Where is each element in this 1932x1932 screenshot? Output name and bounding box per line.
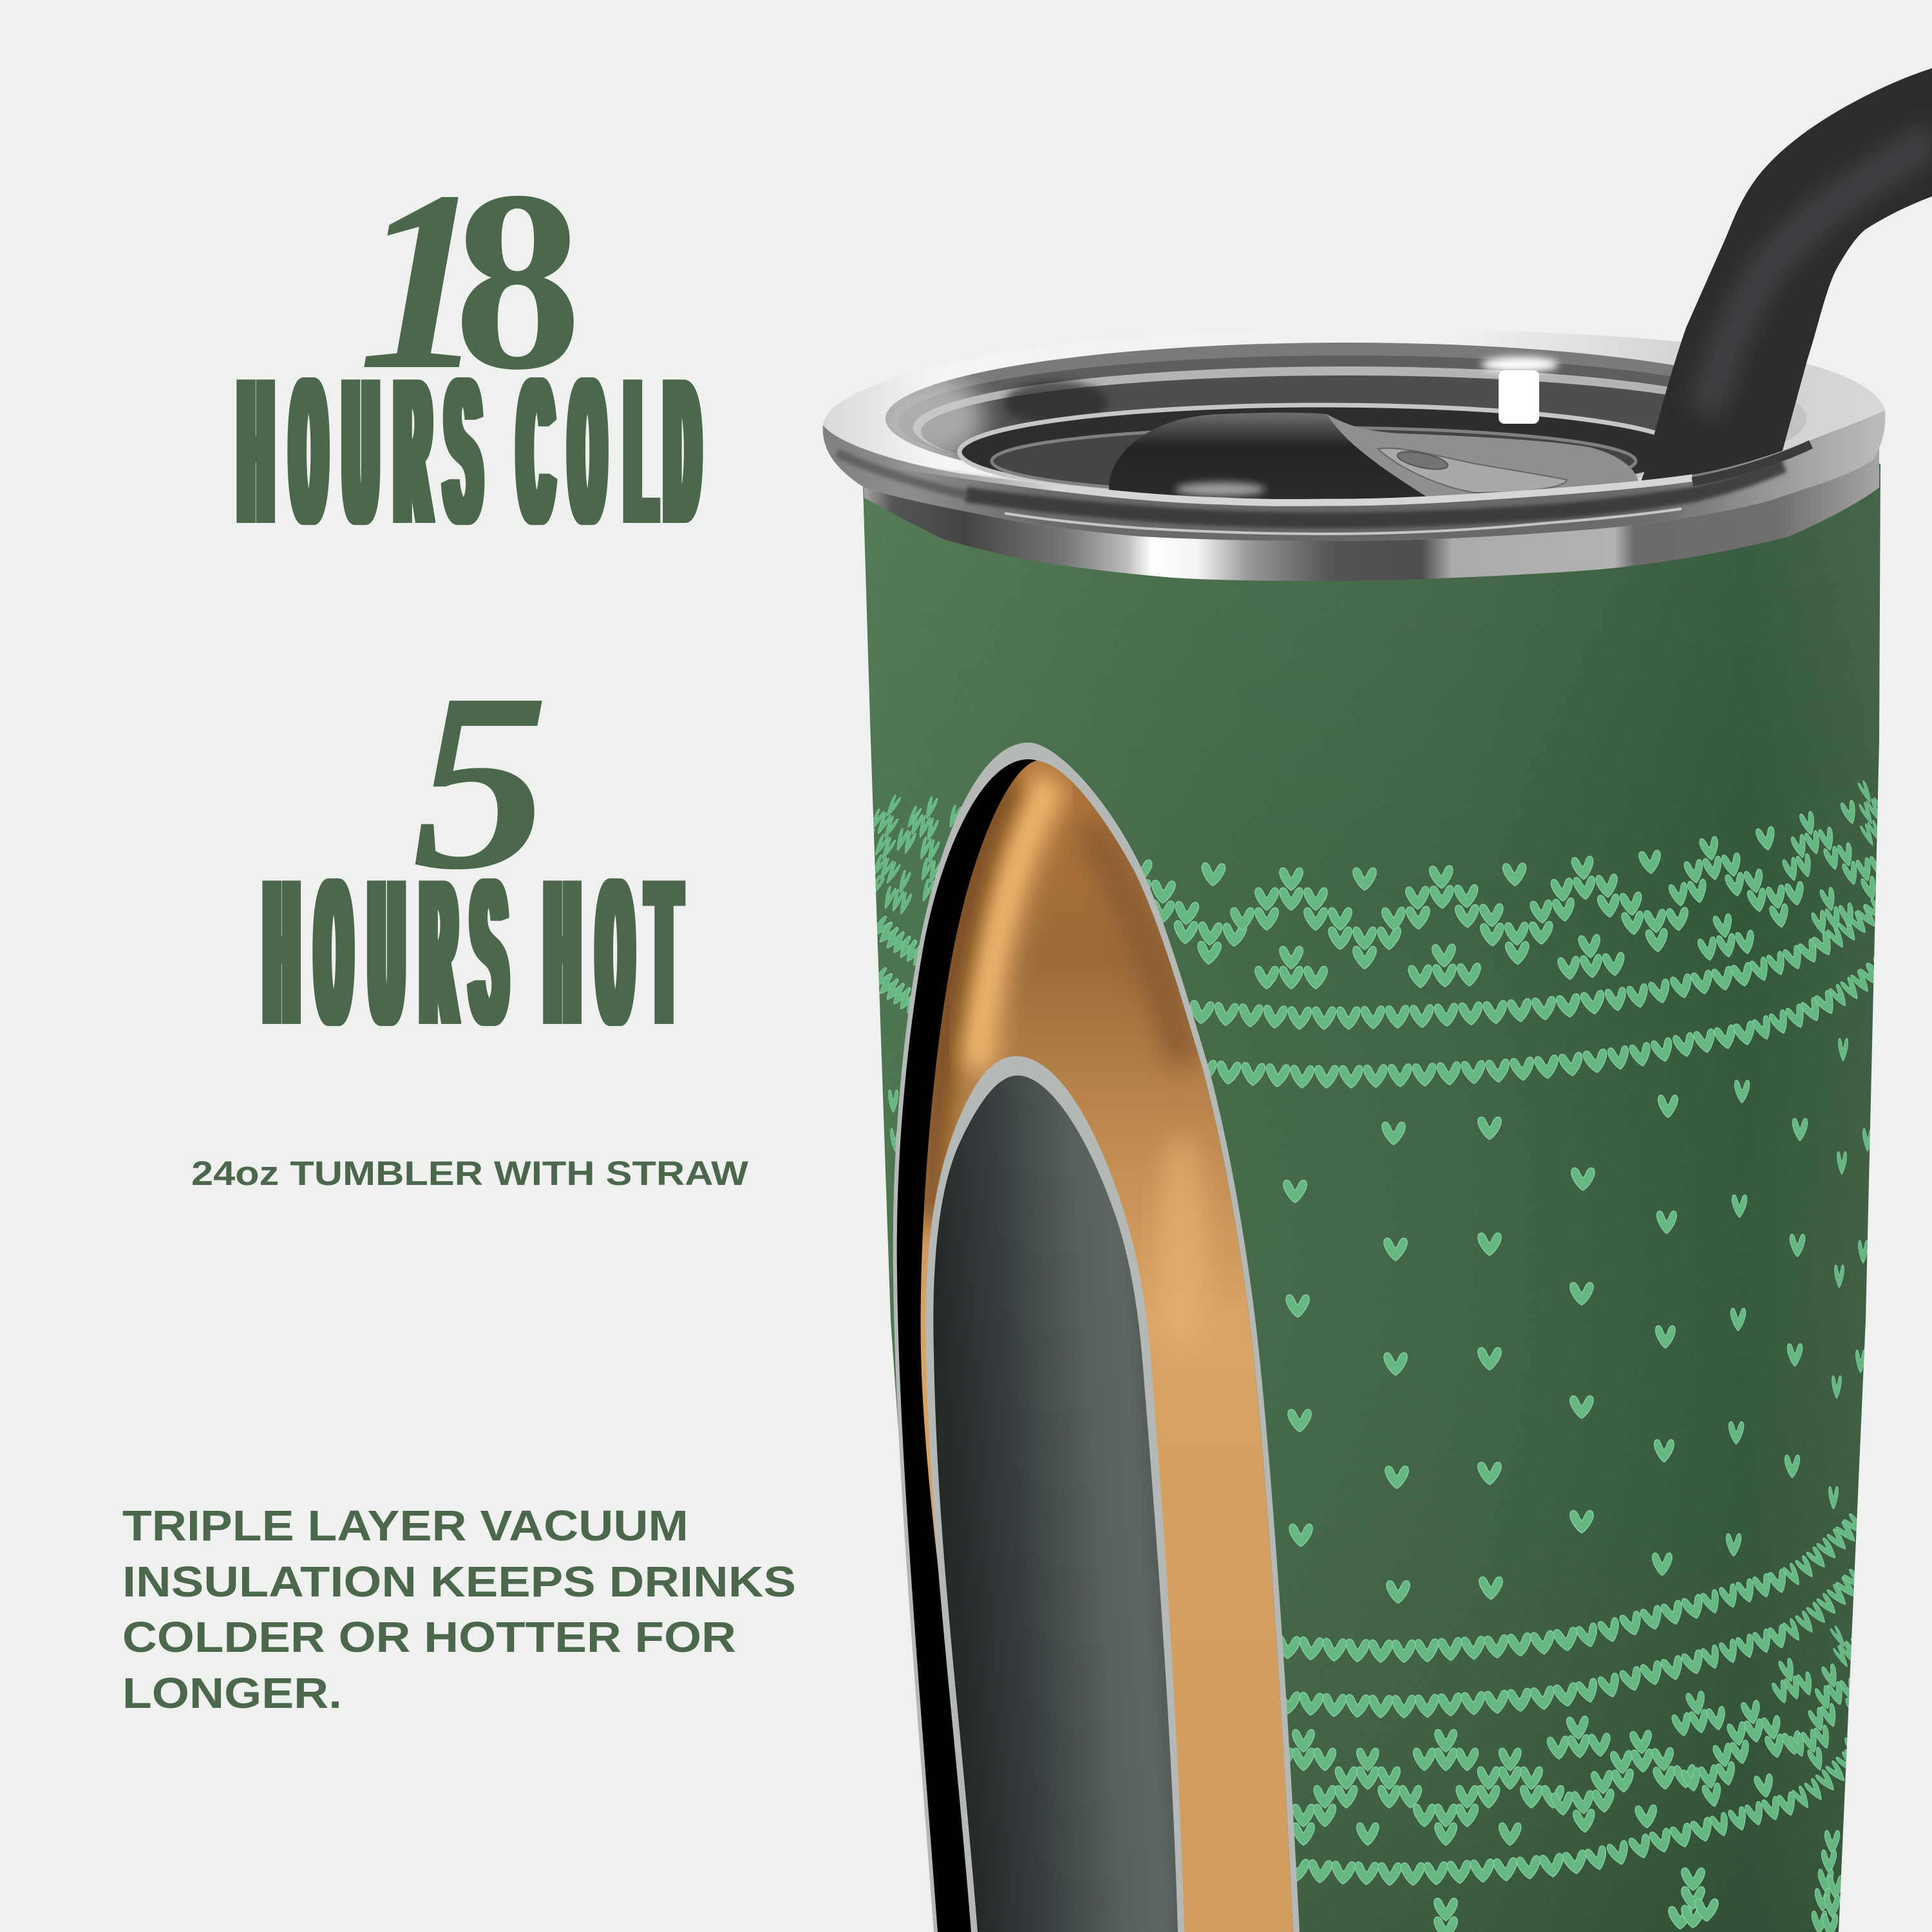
text: insulation description: COLDER OR HOTTER FOR — [122, 1613, 736, 1662]
tumbler illustration — [823, 58, 1932, 1932]
straw — [1641, 68, 1932, 480]
highlight — [1481, 357, 1558, 424]
number: 5: 5 — [412, 641, 549, 922]
lid front lip — [823, 410, 1885, 541]
lid inner wall bands — [886, 343, 1806, 461]
heading: 18 hours cold — [238, 138, 700, 587]
cutaway: outer wall — [893, 743, 1300, 1932]
label: hours cold: HOURS COLD — [238, 343, 700, 587]
text: insulation description: TRIPLE LAYER VACUUM — [122, 1502, 688, 1550]
label: hours hot: HOURS HOT — [263, 844, 682, 1088]
cutaway: inner wall — [925, 1056, 1184, 1932]
lid slider: wedge — [1327, 414, 1639, 499]
lid — [823, 58, 1932, 541]
metal band under lid — [862, 438, 1879, 581]
number: 18: 1 — [358, 138, 487, 423]
cutaway: dark interior — [933, 1075, 1178, 1932]
text: insulation description: LONGER. — [122, 1669, 342, 1718]
lid silhouette and rim — [823, 329, 1885, 541]
cutaway: black vacuum gap — [897, 759, 1293, 1932]
knit sweater pattern — [833, 779, 1932, 1928]
text: insulation description: INSULATION KEEPS DRINKS — [122, 1558, 796, 1606]
number: 18: 8 — [453, 138, 582, 423]
lid floor ring — [960, 405, 1687, 499]
cutaway: copper layer — [921, 761, 1293, 1932]
lid slider: dome — [1109, 413, 1430, 499]
tumbler body — [837, 464, 1893, 1932]
text: insulation description — [122, 1502, 796, 1718]
lid slider: mark — [1378, 448, 1567, 493]
heading: 5 hours hot — [263, 641, 682, 1088]
text: product name: 24oz TUMBLER WITH STRAW — [191, 1155, 748, 1193]
